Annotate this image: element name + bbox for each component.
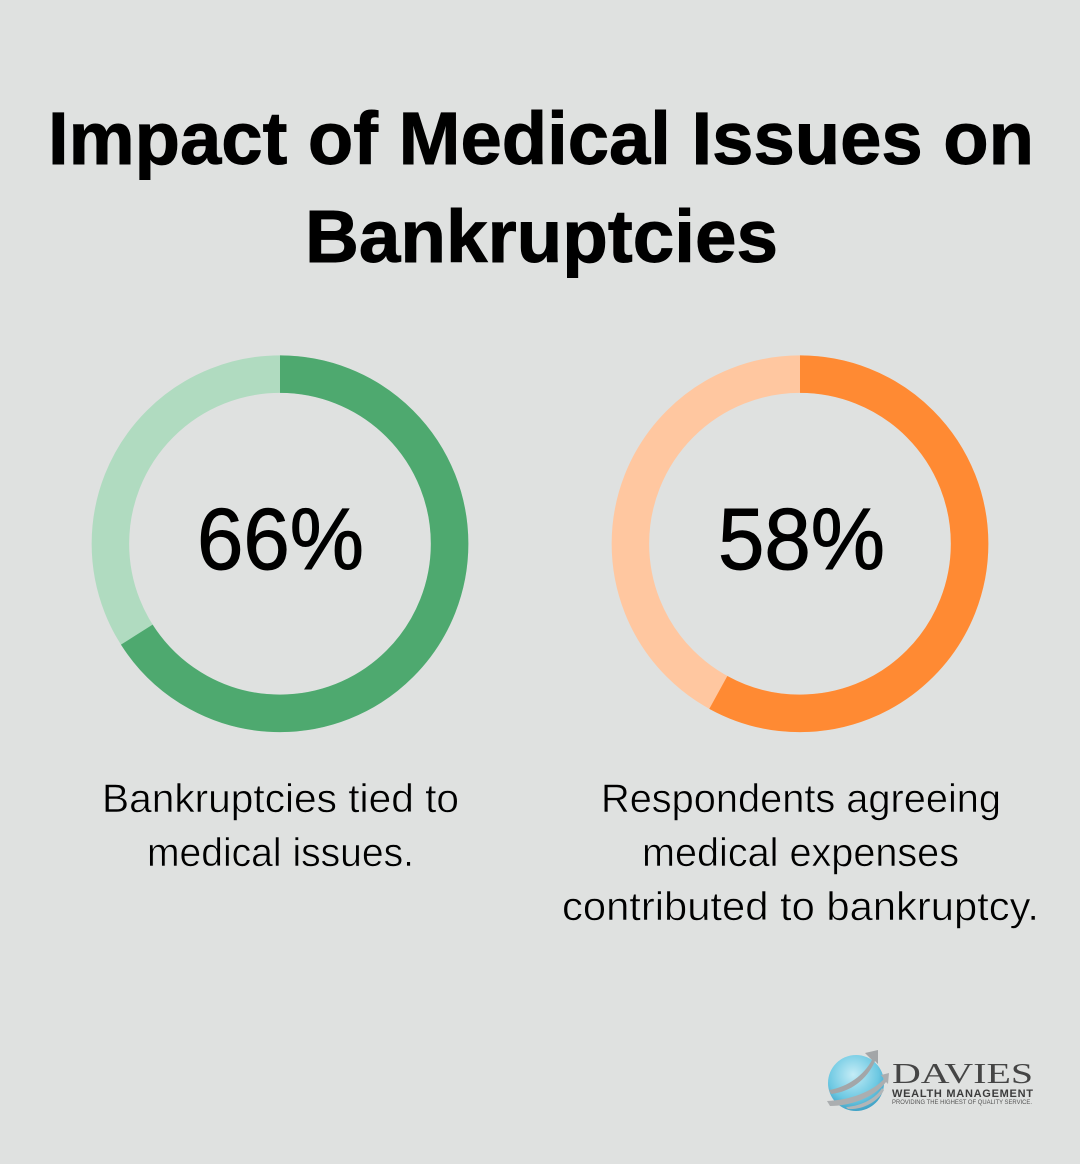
logo: Davies Wealth Management bbox=[827, 1050, 1033, 1111]
caption: bankruptcies tied to medical issues: medical issues. bbox=[147, 831, 414, 875]
title: Bankruptcies bbox=[305, 195, 778, 278]
caption: respondents agreeing: medical expenses bbox=[642, 831, 959, 875]
caption: respondents agreeing: Respondents agreeing bbox=[601, 777, 1001, 821]
donut chart: 58% bbox=[630, 374, 970, 713]
stat: 58%: 58% bbox=[718, 491, 885, 588]
title: Impact of Medical Issues on bbox=[48, 97, 1034, 180]
wordmark: Wealth Management: WEALTH MANAGEMENT bbox=[892, 1088, 1033, 1100]
wordmark: Davies: DAVIES bbox=[892, 1058, 1033, 1090]
tagline: PROVIDING THE HIGHEST OF QUALITY SERVICE. bbox=[892, 1099, 1032, 1106]
caption: bankruptcies tied to medical issues: Bankruptcies tied to bbox=[102, 777, 459, 821]
caption: respondents agreeing bbox=[562, 777, 1039, 929]
title bbox=[48, 97, 1034, 278]
donut chart: 66% bbox=[110, 374, 450, 713]
icon: globe with arrows bbox=[827, 1050, 889, 1111]
stat: 66%: 66% bbox=[197, 491, 364, 588]
caption: respondents agreeing: contributed to bankruptcy. bbox=[562, 885, 1039, 929]
caption: bankruptcies tied to medical issues bbox=[102, 777, 459, 875]
panel: respondents agreeing bbox=[562, 374, 1039, 929]
panel: bankruptcies tied to medical issues bbox=[102, 374, 459, 875]
